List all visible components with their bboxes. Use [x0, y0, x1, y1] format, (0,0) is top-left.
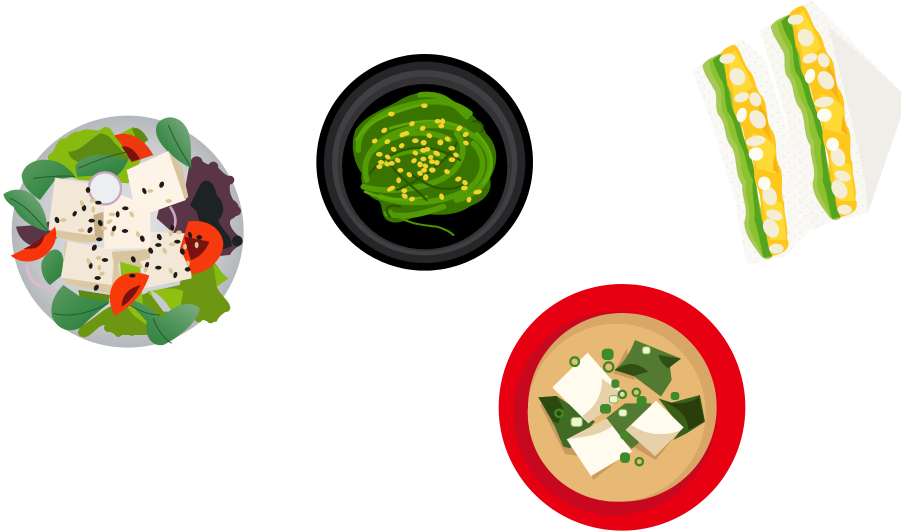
front sandwich [692, 38, 813, 265]
dish: seaweed salad [316, 54, 533, 271]
shadows [540, 348, 680, 480]
dish: miso soup [499, 284, 745, 531]
red bowl [499, 284, 745, 531]
green lettuce [48, 127, 147, 183]
red onion rings [153, 207, 175, 243]
dish: egg sandwiches [692, 0, 901, 265]
soup [528, 313, 717, 502]
black bowl [316, 54, 533, 271]
dish: tofu salad [3, 116, 244, 348]
sesame seeds [371, 104, 482, 203]
red leaf lettuce [16, 156, 242, 256]
onion ring on tofu [89, 172, 121, 204]
green onion rings [555, 357, 643, 465]
tofu cubes [48, 151, 192, 293]
wakame seaweed [538, 340, 705, 448]
back sandwich [760, 0, 901, 230]
sesame seeds [54, 181, 202, 291]
tofu pieces [552, 353, 684, 476]
seaweed noodles [353, 92, 496, 222]
tomato wedges [11, 221, 223, 316]
trailing strand [390, 210, 453, 235]
plate [12, 116, 244, 348]
top tomato wedge [114, 134, 153, 162]
spinach leaves [22, 160, 75, 200]
